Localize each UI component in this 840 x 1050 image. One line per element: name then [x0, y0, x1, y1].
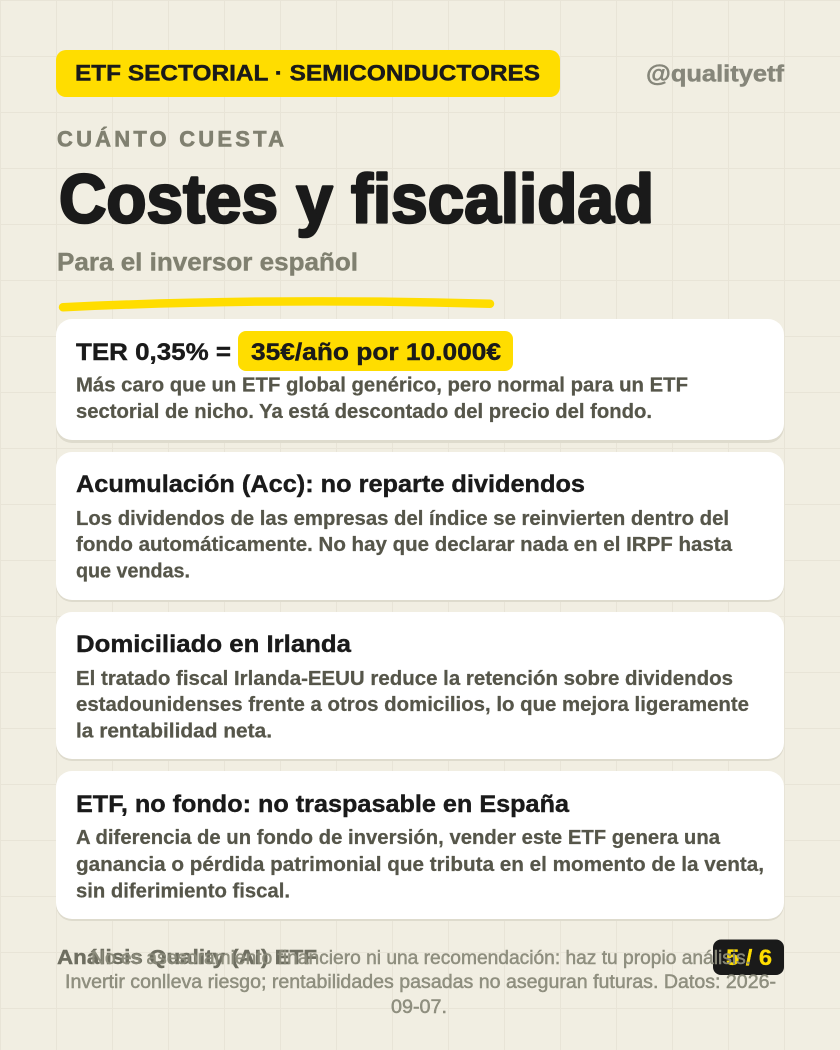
eyebrow: CUÁNTO CUESTA	[57, 126, 284, 152]
panel: TER	[56, 319, 784, 443]
no traspasable description: A diferencia de un fondo de inversión, vender este ETF genera una	[76, 827, 721, 849]
no traspasable heading: ETF, no fondo: no traspasable en España	[76, 791, 570, 818]
no traspasable description	[76, 827, 764, 902]
TER description	[76, 374, 688, 423]
disclaimer: 09-07.	[391, 997, 447, 1018]
acumulación description: Los dividendos de las empresas del índice se reinvierten dentro del	[76, 508, 729, 530]
disclaimer: No es asesoramiento financiero ni una recomendación: haz tu propio análisis.	[91, 948, 751, 969]
page counter	[713, 940, 784, 975]
highlight underline	[63, 301, 490, 307]
panel: no traspasable	[56, 771, 784, 921]
domicilio heading: Domiciliado en Irlanda	[76, 631, 352, 658]
domicilio description	[76, 668, 749, 742]
title: Costes y fiscalidad	[59, 160, 654, 238]
header badge	[56, 50, 560, 97]
disclaimer: Invertir conlleva riesgo; rentabilidades pasadas no aseguran futuras. Datos: 2026-	[65, 972, 776, 993]
acumulación description: que vendas.	[76, 560, 190, 582]
acumulación description	[76, 508, 733, 582]
panel: acumulación	[56, 452, 784, 602]
TER heading: TER 0,35% =	[76, 339, 231, 366]
domicilio description: la rentabilidad neta.	[76, 720, 272, 742]
domicilio description: estadounidenses frente a otros domicilios, lo que mejora ligeramente	[76, 694, 749, 716]
acumulación description: fondo automáticamente. No hay que declarar nada en el IRPF hasta	[76, 534, 733, 556]
cost highlight	[238, 331, 513, 371]
TER description: sectorial de nicho. Ya está descontado del precio del fondo.	[76, 401, 652, 423]
acumulación heading: Acumulación (Acc): no reparte dividendos	[76, 471, 585, 498]
no traspasable description: ganancia o pérdida patrimonial que tributa en el momento de la venta,	[76, 854, 764, 876]
panel: domicilio	[56, 612, 784, 761]
header badge: ETF SECTORIAL · SEMICONDUCTORES	[75, 60, 540, 86]
domicilio description: El tratado fiscal Irlanda-EEUU reduce la retención sobre dividendos	[76, 668, 733, 690]
page counter: 5 / 6	[726, 945, 772, 970]
subtitle: Para el inversor español	[57, 248, 358, 276]
cost highlight: 35€/año por 10.000€	[251, 339, 501, 366]
disclaimer	[65, 948, 776, 1018]
handle: @qualityetf	[646, 60, 784, 86]
no traspasable description: sin diferimiento fiscal.	[76, 880, 290, 902]
footer label: Análisis Quality (AI) ETF	[57, 947, 317, 969]
TER description: Más caro que un ETF global genérico, pero normal para un ETF	[76, 374, 688, 396]
